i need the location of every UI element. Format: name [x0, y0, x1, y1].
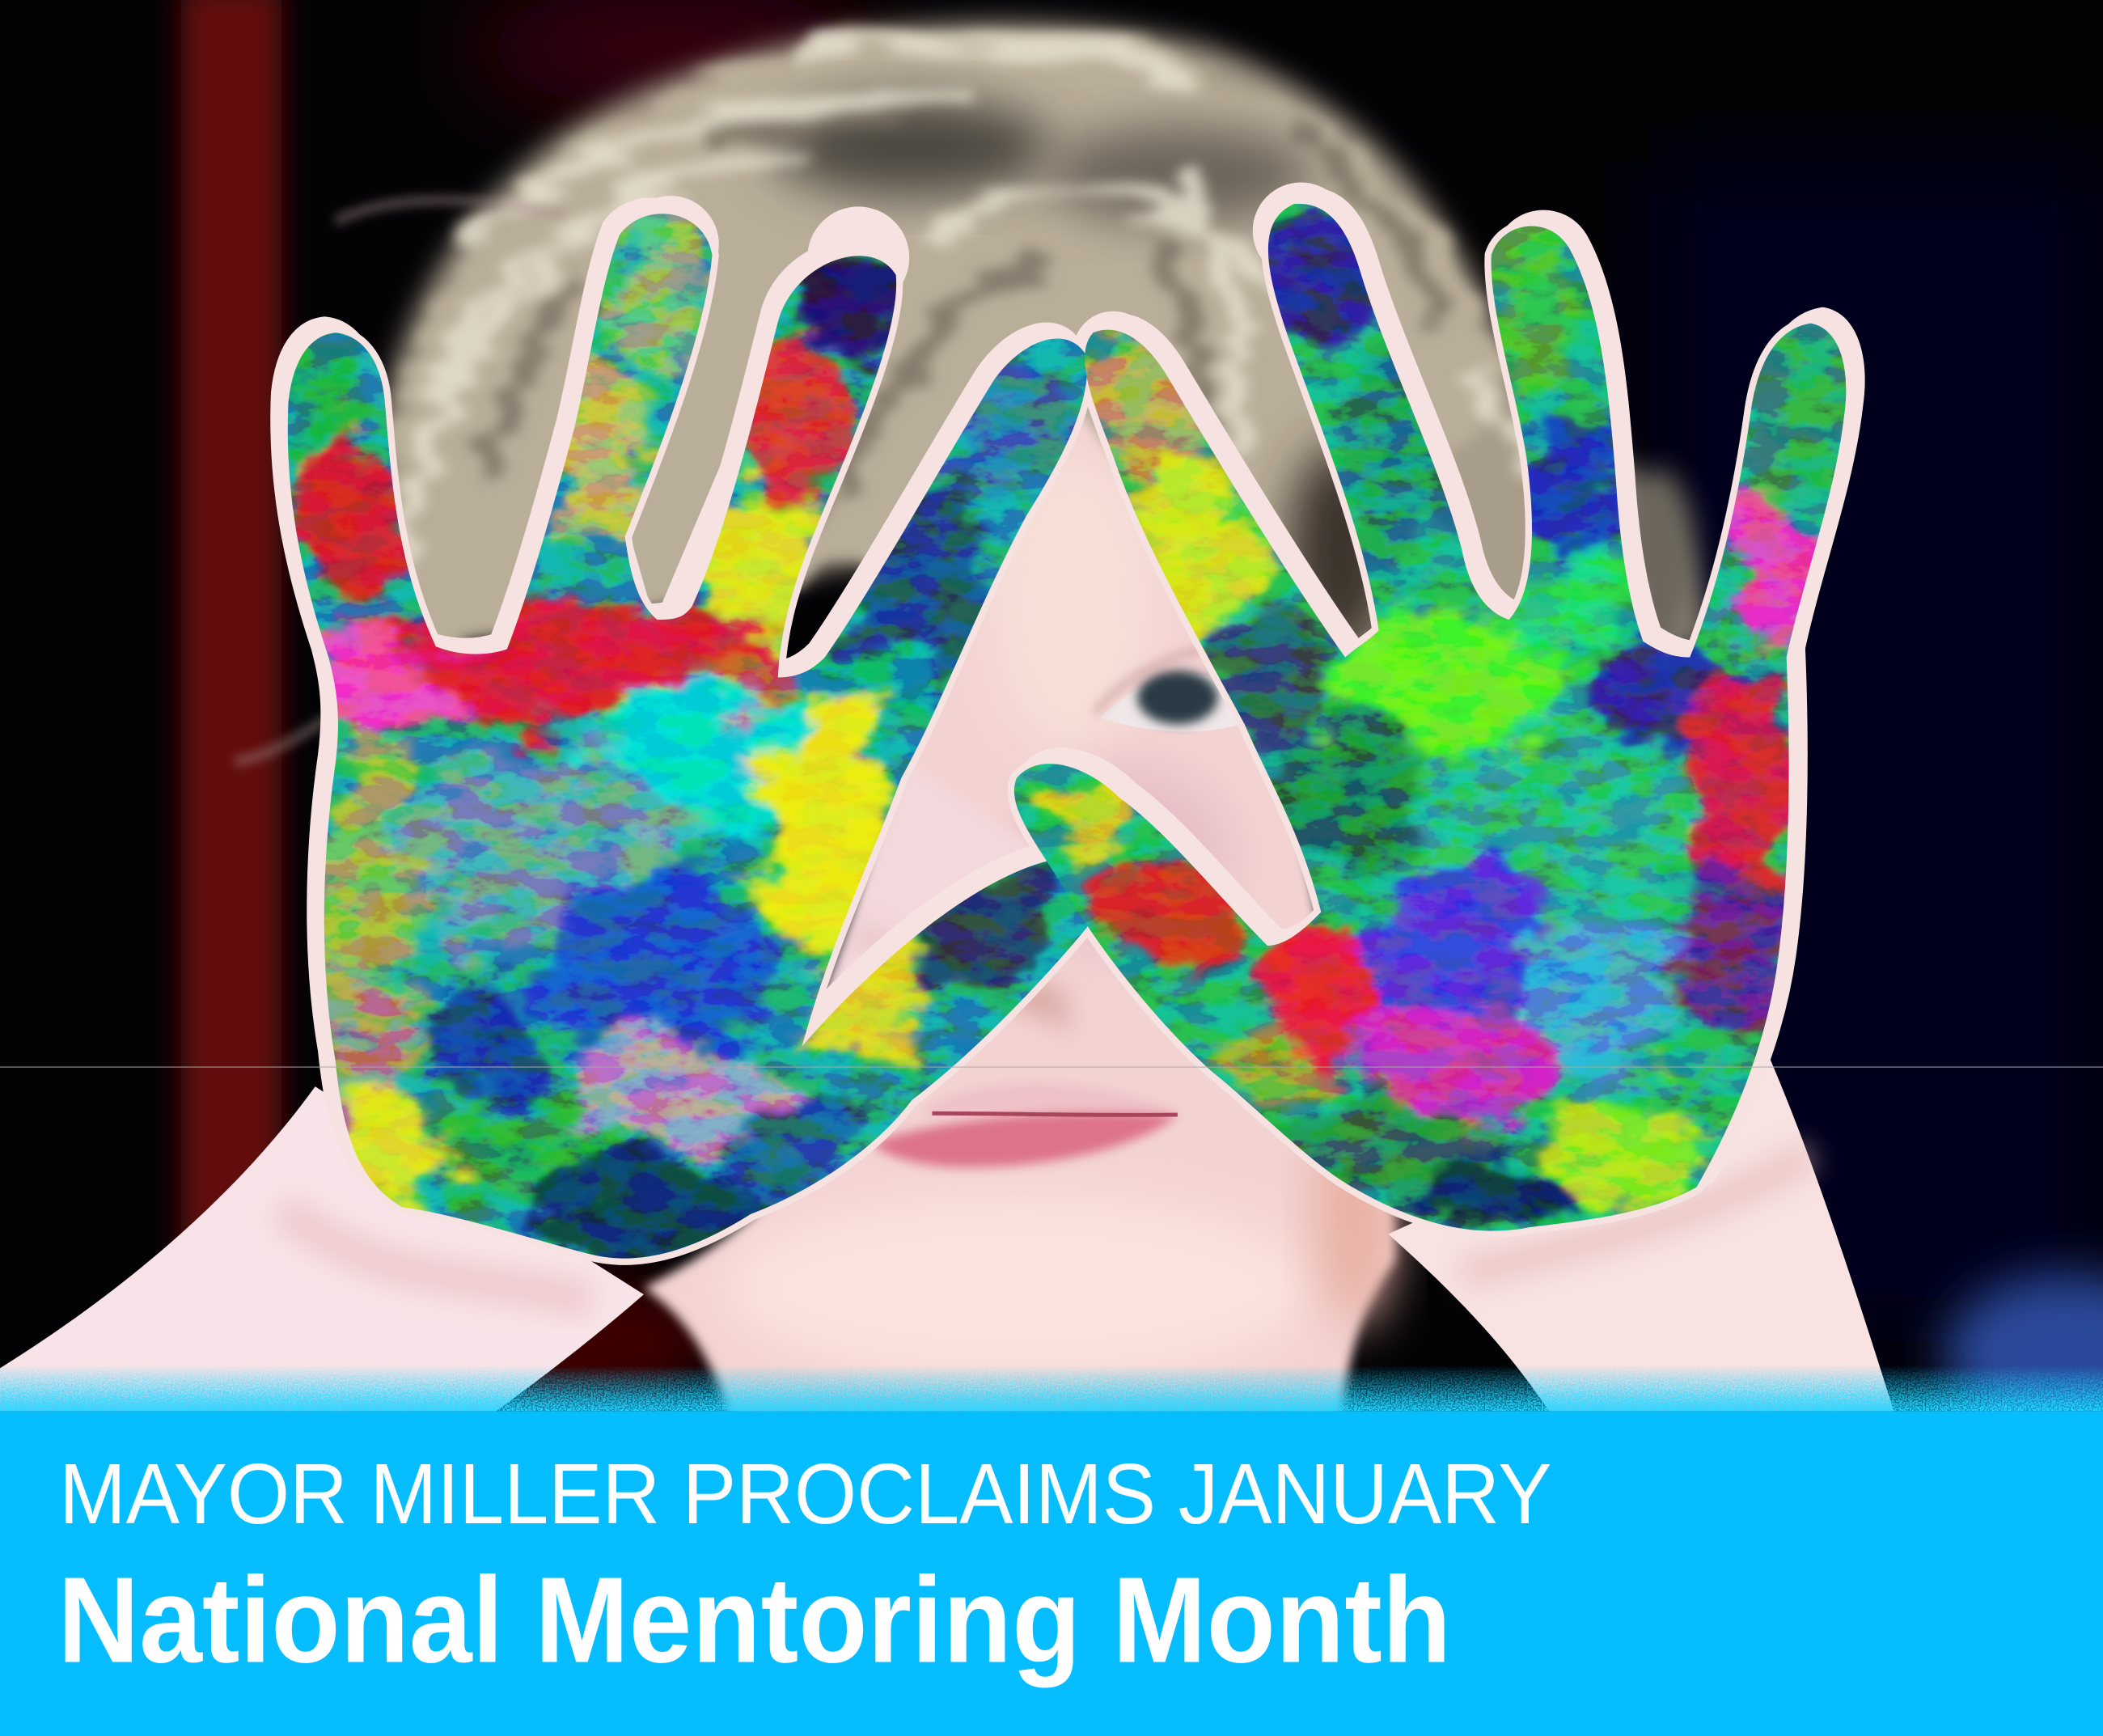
face — [644, 402, 1394, 1422]
eye — [1094, 644, 1261, 731]
arm: left — [0, 1086, 644, 1411]
arm: right — [1388, 1060, 1894, 1411]
heading: proclamation line: MAYOR MILLER PROCLAIMS JANUARY — [59, 1446, 1551, 1542]
hand: left, skin border — [277, 196, 1096, 1259]
nose — [858, 925, 1073, 1033]
lips — [872, 1082, 1180, 1167]
hand: right, paint — [1005, 188, 1864, 1247]
heading: National Mentoring Month: National Mentoring Month — [57, 1551, 1451, 1687]
grainy fade into banner — [0, 1366, 2103, 1411]
hand: left, paint — [269, 188, 1140, 1274]
hair — [235, 23, 1701, 762]
hand: right, skin border — [1014, 183, 1858, 1231]
banner — [0, 1411, 2103, 1736]
thin horizontal seam line — [0, 1066, 2103, 1068]
skin between left palm and thumb — [827, 776, 1029, 989]
